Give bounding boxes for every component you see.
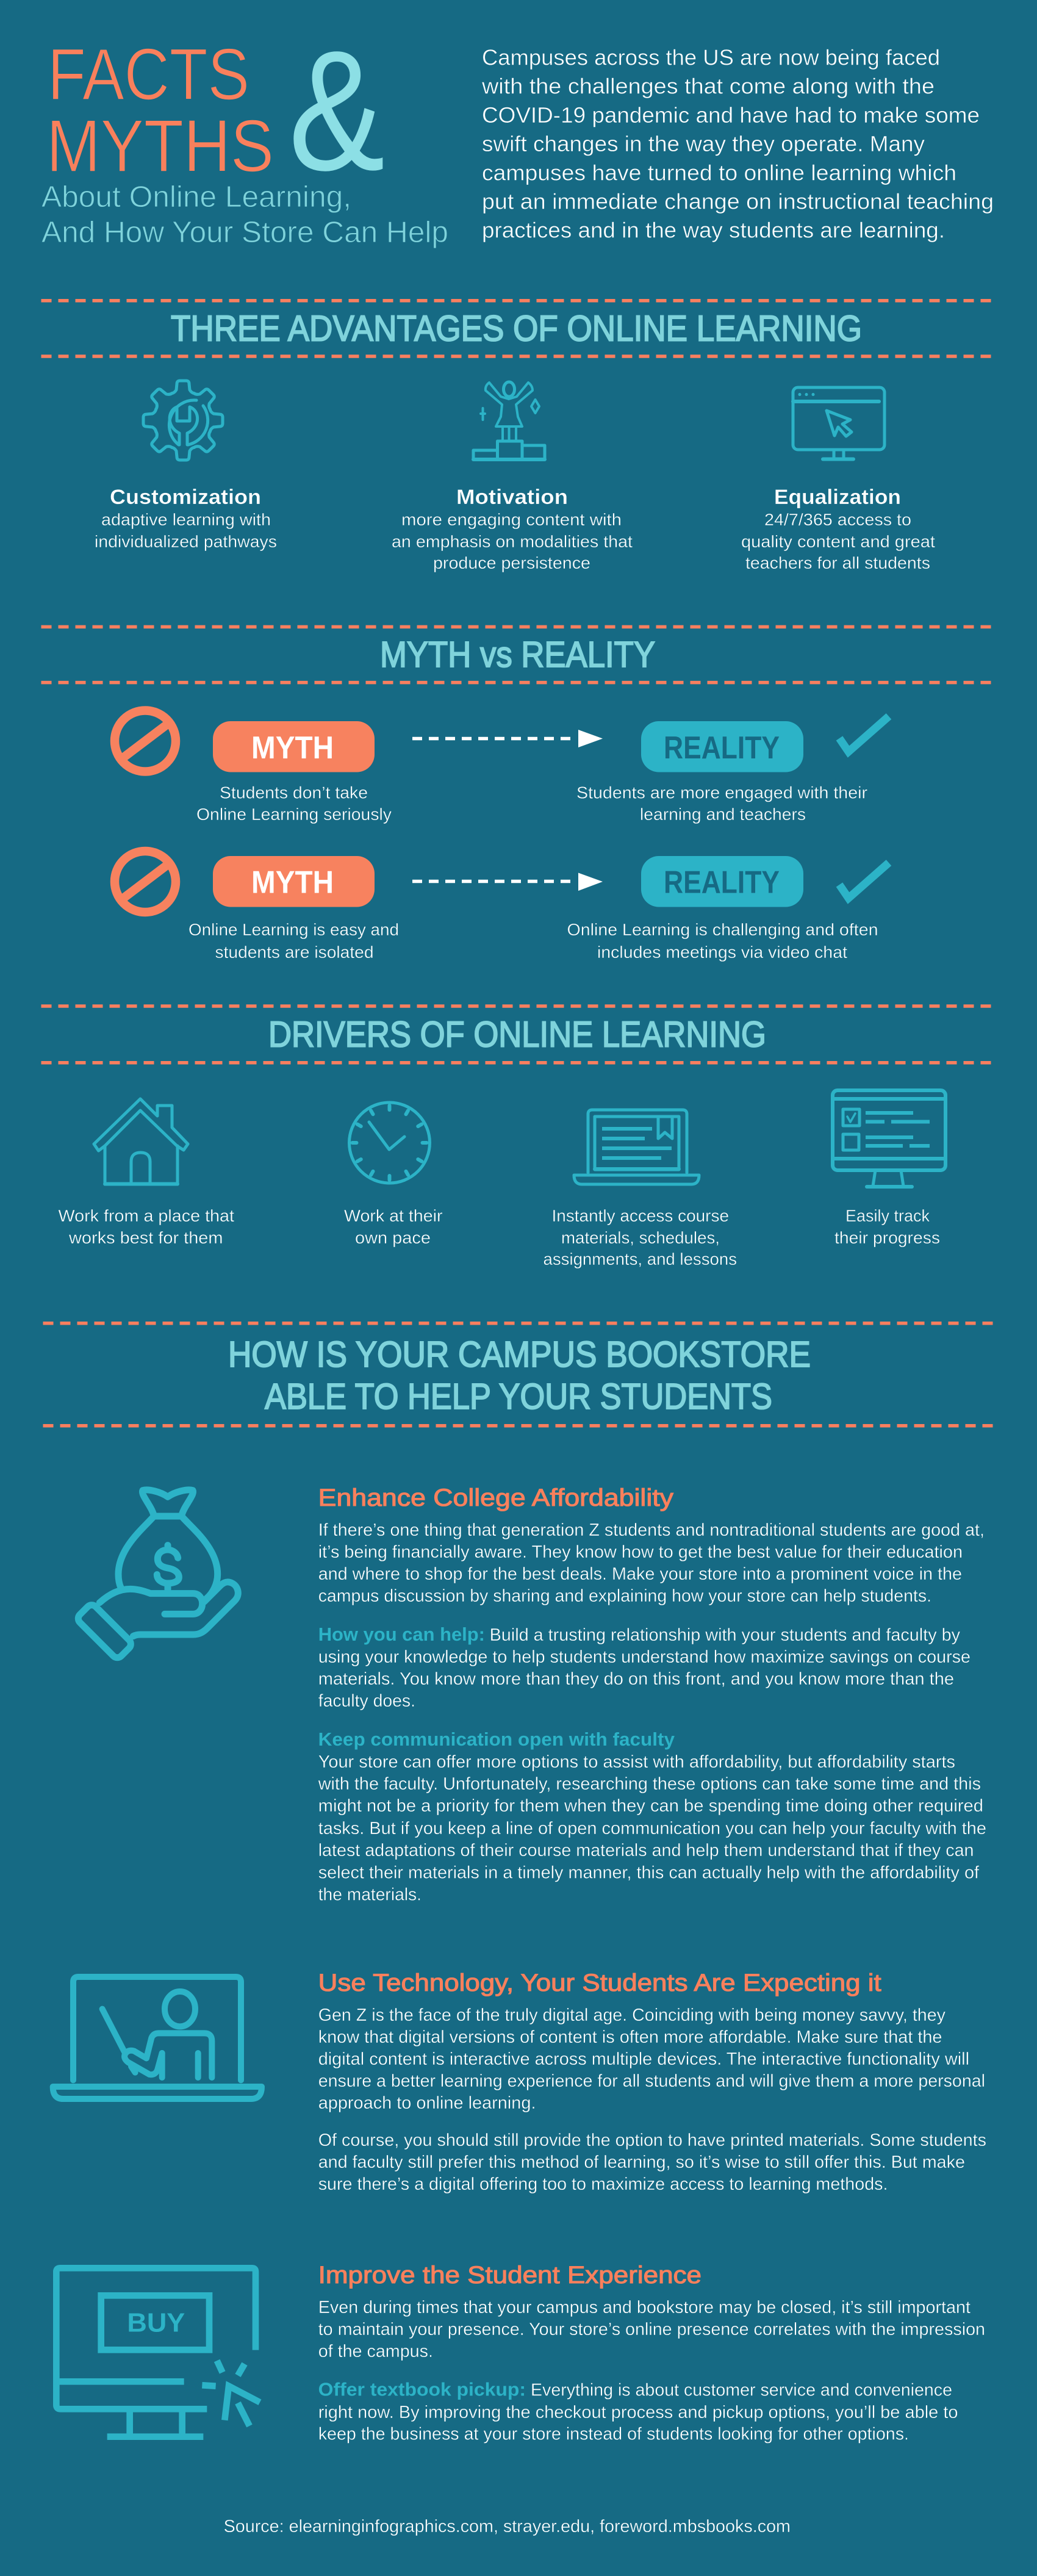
myth text [196, 783, 392, 824]
paragraph: presence: of the campus. [318, 2342, 433, 2361]
myth text: Online Learning is easy and [188, 920, 399, 939]
description: produce persistence [433, 553, 590, 572]
reality text: Online Learning is challenging and often [567, 920, 878, 939]
icon: monitor with cursor [793, 387, 884, 459]
icon: monitor with buy button [56, 2268, 260, 2437]
panel: use technology [53, 1970, 986, 2194]
title: FACTS: FACTS [48, 34, 249, 115]
paragraph: textbook pickup: Everything is about customer service and convenience [531, 2381, 952, 2400]
reality text: learning and teachers [640, 805, 806, 824]
driver text: own pace [355, 1228, 431, 1247]
heading: three advantages: THREE ADVANTAGES OF ONLINE LEARNING [171, 309, 862, 349]
source line: Source: elearninginfographics.com, strayer.edu, foreword.mbsbooks.com [224, 2517, 791, 2536]
icon: laptop with book [574, 1110, 699, 1184]
icon: prohibition sign [115, 710, 176, 771]
description: an emphasis on modalities that [392, 532, 633, 551]
driver text [344, 1206, 443, 1247]
intro paragraph: with the challenges that come along with the [481, 74, 935, 99]
paragraph: digital age: Gen Z is the face of the truly digital age. Coinciding with being money savvy, they [318, 2006, 946, 2025]
subtitle: And How Your Store Can Help [41, 216, 448, 249]
description [392, 510, 633, 572]
paragraph: intro: and where to shop for the best deals. Make your store into a prominent voice in the [318, 1564, 962, 1584]
heading: campus bookstore: HOW IS YOUR CAMPUS BOOKSTORE [228, 1334, 811, 1375]
icon: monitor with buy button: BUY [127, 2308, 185, 2338]
myth pill [213, 856, 375, 907]
reality text [567, 920, 878, 962]
paragraph: digital age [318, 2006, 985, 2113]
panel: driver home [59, 1099, 234, 1247]
label: equalization: Equalization [774, 486, 901, 509]
paragraph: textbook pickup: Offer textbook pickup: [318, 2379, 526, 2400]
icon: monitor checklist [833, 1090, 946, 1187]
icon: prohibition sign [115, 851, 176, 912]
driver text: works best for them [68, 1228, 223, 1247]
icon: teacher on laptop [53, 1977, 262, 2099]
intro paragraph: put an immediate change on instructional teaching [482, 189, 994, 214]
heading: Enhance College Affordability [318, 1484, 673, 1511]
reality text [576, 783, 867, 824]
description [95, 510, 277, 551]
description: more engaging content with [401, 510, 622, 529]
paragraph: presence [318, 2298, 985, 2361]
icon: gear with wrench [143, 381, 223, 460]
description: quality content and great [741, 532, 935, 551]
panel: driver pace [344, 1103, 443, 1247]
paragraph: printed materials: Of course, you should still provide the option to have printed materials. Some students [318, 2131, 986, 2150]
panel: myth vs reality row 2 [115, 851, 889, 962]
heading: campus bookstore [228, 1334, 811, 1417]
paragraph: textbook pickup: keep the business at your store instead of students looking for other options. [318, 2425, 909, 2444]
paragraph: keep communication open: the materials. [318, 1885, 422, 1905]
heading: myth vs reality: MYTH vs REALITY [380, 635, 655, 675]
paragraph: keep communication open [318, 1729, 986, 1905]
paragraph: presence: to maintain your presence. Your store’s online presence correlates with the impression [318, 2320, 985, 2339]
paragraph: how you can help: faculty does. [318, 1691, 415, 1711]
intro paragraph: Campuses across the US are now being faced [482, 45, 940, 70]
paragraph: how you can help: How you can help: [318, 1624, 485, 1645]
driver text [59, 1206, 234, 1247]
driver text: Work at their [344, 1206, 443, 1225]
myth pill: MYTH [251, 865, 334, 901]
panel: myth vs reality row 1 [115, 710, 889, 824]
paragraph: digital age: digital content is interactive across multiple devices. The interactive functionality will [318, 2049, 969, 2069]
driver text [543, 1206, 737, 1268]
panel: motivation [392, 382, 633, 572]
myth pill: MYTH [251, 730, 334, 766]
panel: equalization [741, 387, 935, 572]
paragraph: keep communication open: with the faculty. Unfortunately, researching these options can take some time and this [318, 1774, 981, 1794]
paragraph: keep communication open: might not be a priority for them when they can be spending time doing other required [318, 1796, 983, 1816]
paragraph: intro: it’s being financially aware. They know how to get the best value for their education [318, 1542, 963, 1562]
title block [41, 16, 448, 249]
arrow [412, 872, 603, 891]
paragraph: how you can help [318, 1624, 971, 1711]
paragraph: textbook pickup: right now. By improving the checkout process and pickup options, you’ll be able to [318, 2403, 958, 2422]
panel: customization [95, 381, 277, 551]
reality pill [641, 856, 803, 907]
paragraph: printed materials: sure there’s a digital offering too to maximize access to learning methods. [318, 2175, 888, 2194]
panel: improve the student experience [56, 2262, 985, 2444]
description [741, 510, 935, 572]
intro paragraph: swift changes in the way they operate. Many [482, 131, 925, 156]
panel: driver progress [833, 1090, 946, 1247]
icon: clock [349, 1103, 429, 1183]
myth text: students are isolated [215, 943, 373, 962]
panel: driver materials [543, 1110, 737, 1268]
heading: drivers: DRIVERS OF ONLINE LEARNING [268, 1014, 766, 1054]
paragraph: keep communication open: latest adaptations of their course materials and help them understand that if they can [318, 1841, 974, 1860]
icon detail: book lines [602, 1129, 672, 1158]
panel: enhance college affordability [76, 1484, 986, 1905]
subtitle [41, 181, 448, 249]
paragraph: keep communication open: Keep communication open with faculty [318, 1729, 675, 1750]
reality pill: REALITY [664, 730, 780, 766]
driver text: Easily track [845, 1206, 930, 1225]
icon: person on podium [473, 382, 545, 459]
intro paragraph: campuses have turned to online learning which [482, 160, 956, 185]
description: 24/7/365 access to [764, 510, 911, 529]
icon detail: list lines [866, 1113, 930, 1146]
driver text: Work from a place that [59, 1206, 234, 1225]
title: ampersand: & [289, 16, 385, 206]
paragraph: digital age: know that digital versions of content is often more affordable. Make sure that the [318, 2027, 942, 2047]
icon: check mark [839, 863, 889, 898]
paragraph: how you can help: using your knowledge to help students understand how maximize savings on course [318, 1647, 971, 1667]
driver text: Instantly access course [551, 1206, 729, 1225]
description: adaptive learning with [101, 510, 271, 529]
intro paragraph: COVID-19 pandemic and have had to make some [482, 103, 980, 128]
heading: campus bookstore: ABLE TO HELP YOUR STUDENTS [265, 1376, 772, 1417]
paragraph: keep communication open: Your store can offer more options to assist with affordability, but affordability starts [318, 1752, 955, 1772]
icon: money bag in hand [76, 1490, 238, 1660]
intro paragraph: practices and in the way students are learning. [482, 218, 945, 243]
paragraph: digital age: ensure a better learning experience for all students and will give them a more personal [318, 2071, 985, 2091]
intro paragraph [481, 45, 994, 243]
myth text [188, 920, 399, 962]
driver text: their progress [834, 1228, 940, 1247]
description: teachers for all students [745, 553, 930, 572]
reality text: includes meetings via video chat [597, 943, 847, 962]
driver text: assignments, and lessons [543, 1250, 737, 1268]
driver text [834, 1206, 940, 1247]
arrow [412, 730, 603, 747]
title: MYTHS: MYTHS [46, 104, 274, 187]
description: individualized pathways [95, 532, 277, 551]
paragraph: printed materials: and faculty still prefer this method of learning, so it’s wise to still offer this. But make [318, 2153, 965, 2172]
heading: Use Technology, Your Students Are Expecting it [318, 1970, 881, 1996]
paragraph: keep communication open: tasks. But if you keep a line of open communication you can help your faculty with the [318, 1819, 986, 1838]
paragraph: printed materials [318, 2131, 986, 2194]
label: motivation: Motivation [456, 486, 568, 509]
paragraph: intro [318, 1520, 985, 1606]
heading: Improve the Student Experience [318, 2262, 702, 2289]
driver text: materials, schedules, [561, 1228, 720, 1247]
label: customization: Customization [110, 486, 261, 509]
reality pill [641, 721, 803, 772]
paragraph: how you can help: Build a trusting relationship with your students and faculty by [490, 1625, 960, 1645]
myth text: Online Learning seriously [196, 805, 392, 824]
paragraph: how you can help: materials. You know more than they do on this front, and you know more than the [318, 1669, 954, 1689]
paragraph: keep communication open: select their materials in a timely manner, this can actually help with the affordability of [318, 1863, 980, 1883]
paragraph: presence: Even during times that your campus and bookstore may be closed, it’s still important [318, 2298, 971, 2317]
paragraph: intro: campus discussion by sharing and explaining how your store can help students. [318, 1586, 931, 1606]
icon: check mark [839, 716, 889, 752]
reality text: Students are more engaged with their [576, 783, 867, 802]
myth pill [213, 721, 375, 772]
paragraph: digital age: approach to online learning. [318, 2093, 536, 2113]
reality pill: REALITY [664, 865, 780, 901]
myth text: Students don’t take [220, 783, 368, 802]
paragraph: textbook pickup [318, 2379, 958, 2444]
paragraph: intro: If there’s one thing that generation Z students and nontraditional students are good at, [318, 1520, 985, 1540]
icon: house [94, 1099, 188, 1184]
subtitle: About Online Learning, [41, 181, 351, 214]
